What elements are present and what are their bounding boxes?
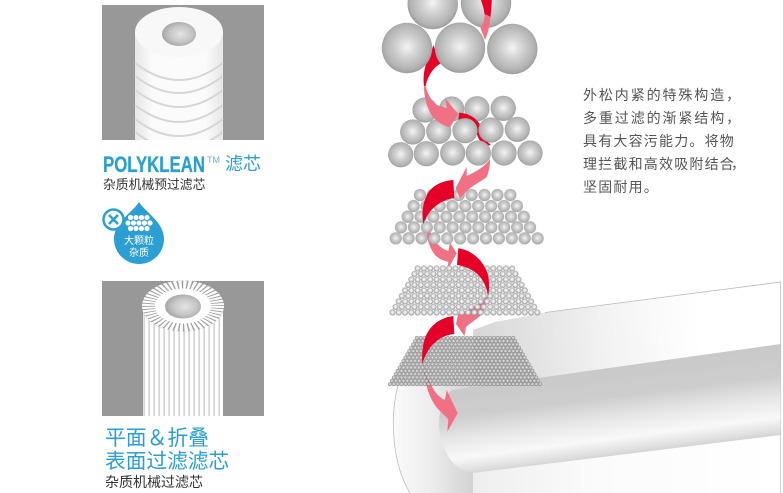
icon: large particle impurity drop: 大颗粒	[124, 234, 154, 247]
arrow: red bend over fifth layer	[422, 316, 454, 364]
arrow: red bend behind first layer	[424, 45, 441, 86]
heading: pleated filter: 表面过滤滤芯	[105, 450, 229, 473]
arrow: red bend over third layer	[423, 180, 454, 224]
icon: large particle impurity drop	[104, 202, 164, 264]
text: description paragraph: 理拦截和高效吸附结合，	[583, 156, 746, 172]
chart: sphere layer 4	[389, 265, 540, 316]
heading: pleated filter	[105, 427, 229, 473]
text: description paragraph: 坚固耐用。	[583, 179, 659, 195]
chart: sphere layer 2 top row	[412, 96, 516, 123]
panel: large cartridge cross-section background	[393, 282, 781, 493]
arrow: red bend over fourth layer	[457, 248, 489, 296]
chart: sphere layer 5, finest media	[388, 336, 542, 386]
text: description paragraph: 外松内紧的特殊构造，	[583, 87, 742, 103]
arrow: pink head over second layer	[424, 86, 458, 127]
arrow: pink bend behind fourth layer	[456, 296, 488, 336]
arrow: pink bend behind third layer	[425, 222, 457, 270]
heading: polyklean: POLYKLEAN	[103, 152, 205, 177]
panel: pleated cartridge photo	[102, 280, 264, 416]
chart: sphere layer 2 lower rows	[388, 117, 543, 167]
text: description paragraph: 具有大容污能力。将物	[583, 133, 735, 149]
arrow: top red and pink bend	[480, 0, 492, 40]
text: description paragraph	[583, 87, 746, 195]
arrow: red bend through second layer	[458, 113, 491, 146]
arrow: pink head behind fifth layer	[423, 362, 458, 432]
heading: pleated filter: 平面＆折叠	[105, 427, 209, 450]
heading: polyklean: 滤芯	[225, 154, 261, 174]
text: polyklean subtitle: 杂质机械预过滤芯	[103, 177, 206, 192]
chart: sphere layer 1, largest media	[382, 0, 538, 74]
text: pleated subtitle: 杂质机械过滤芯	[105, 474, 203, 490]
arrow: pink head over third layer	[456, 159, 490, 198]
icon: large particle impurity drop: 杂质	[129, 247, 149, 259]
chart: sphere layer 3	[389, 189, 544, 245]
heading: polyklean: TM	[207, 155, 220, 165]
text: description paragraph: 多重过滤的渐紧结构，	[583, 110, 742, 126]
panel: polyklean cartridge photo	[102, 5, 264, 149]
